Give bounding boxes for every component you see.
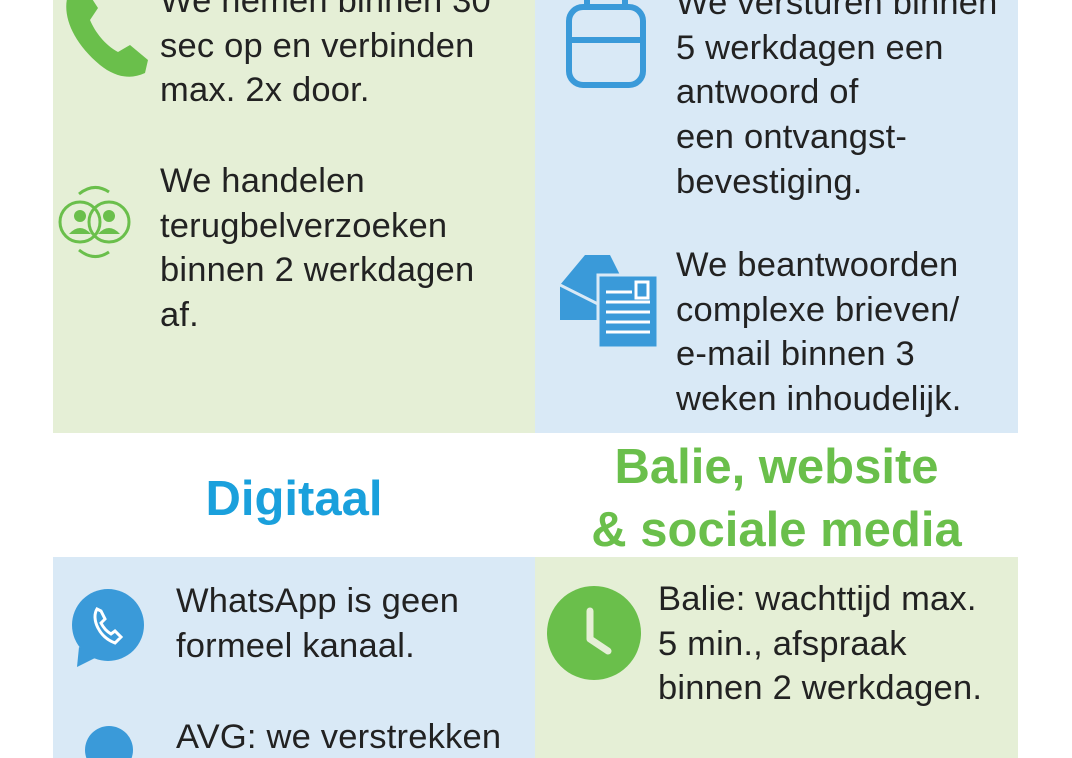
text: post 2: weken inhoudelijk. [676, 380, 962, 418]
text: telefoon 2 [160, 162, 474, 334]
panel: telefoon [53, 0, 535, 433]
icon: clock [547, 586, 641, 680]
panel: digitaal [53, 557, 535, 758]
text: telefoon 2: terugbelverzoeken [160, 207, 447, 245]
text: balie: binnen 2 werkdagen. [658, 669, 982, 707]
text: post 2: complexe brieven/ [676, 291, 959, 329]
text: telefoon 2: af. [160, 296, 199, 334]
icon: mail document [560, 255, 656, 346]
text: whatsapp [176, 582, 459, 665]
icon: phone [66, 0, 148, 77]
text: balie [658, 580, 982, 707]
heading: Balie, website & sociale media: Balie, website [614, 440, 939, 494]
panel: balie [535, 557, 1018, 758]
text: post 2: We beantwoorden [676, 246, 958, 284]
text: post 1 [676, 0, 998, 201]
text: post 1: bevestiging. [676, 163, 863, 201]
heading: Balie, website & sociale media [591, 440, 962, 557]
text: balie: Balie: wachttijd max. [658, 580, 977, 618]
text: telefoon 1: sec op en verbinden [160, 27, 475, 65]
text: AVG: AVG: we verstrekken [176, 718, 501, 756]
text: post 1: een ontvangst- [676, 118, 907, 156]
heading: Balie, website & sociale media: & sociale media [591, 503, 962, 557]
text: whatsapp: formeel kanaal. [176, 627, 415, 665]
text: balie: 5 min., afspraak [658, 625, 907, 663]
icon: people [58, 186, 130, 258]
text: telefoon 1 [160, 0, 491, 109]
icon: bag [566, 0, 646, 88]
text: whatsapp: WhatsApp is geen [176, 582, 459, 620]
text: telefoon 2: binnen 2 werkdagen [160, 251, 474, 289]
text: post 1: antwoord of [676, 73, 858, 111]
icon: blue circle [85, 726, 133, 758]
text: post 1: 5 werkdagen een [676, 29, 944, 67]
text: telefoon 1: max. 2x door. [160, 71, 370, 109]
text: post 2: e-mail binnen 3 [676, 335, 915, 373]
panel: post [535, 0, 1018, 433]
text: telefoon 2: We handelen [160, 162, 365, 200]
icon: whatsapp [72, 589, 144, 667]
heading: Digitaal: Digitaal [206, 472, 382, 526]
text: post 2 [676, 246, 962, 418]
